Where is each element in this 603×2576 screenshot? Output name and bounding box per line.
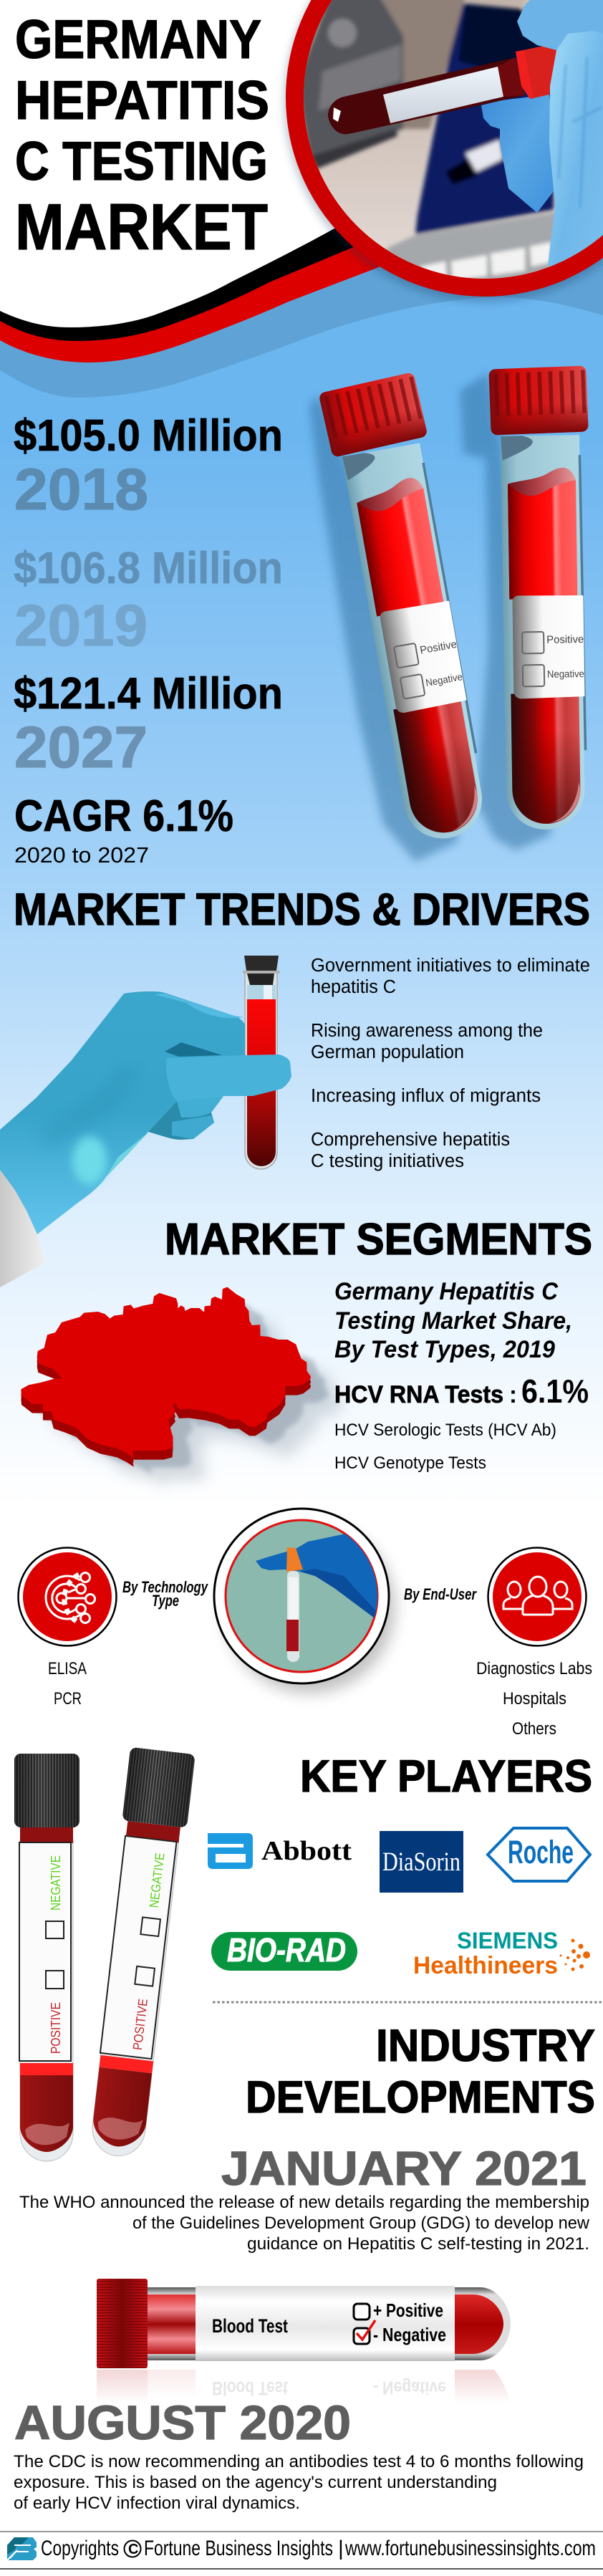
icon: gloved hand holding test tube	[0, 956, 291, 1287]
market share by test types: Germany Hepatitis C	[334, 1278, 558, 1305]
market value stats: $105.0 Million	[14, 411, 283, 461]
market value stats	[14, 411, 283, 868]
icon: people group	[503, 1577, 572, 1615]
icon: black-cap tube left: NEGATIVE	[49, 1855, 63, 1911]
logo: Roche	[488, 1828, 590, 1881]
market value stats: CAGR 6.1%	[14, 792, 233, 841]
tube shadows	[309, 373, 551, 862]
footer	[0, 2532, 603, 2569]
icon: gear with nodes	[46, 1573, 95, 1623]
central circle photo	[214, 1509, 395, 1693]
icon: Fortune Business Insights logo	[7, 2537, 37, 2560]
footer: Copyrights	[41, 2537, 119, 2560]
heading: market segments: MARKET SEGMENTS	[165, 1215, 592, 1264]
development: January 2021: JANUARY 2021	[221, 2142, 587, 2196]
trends and drivers list	[311, 956, 590, 1171]
trends and drivers list: Increasing influx of migrants	[311, 1086, 541, 1106]
footer: Fortune Business Insights	[144, 2537, 333, 2560]
market share by test types: HCV Serologic Tests (HCV Ab)	[334, 1421, 556, 1440]
market share by test types: :	[509, 1381, 517, 1408]
segment labels: Hospitals	[503, 1689, 566, 1708]
market share by test types: HCV Genotype Tests	[334, 1453, 486, 1473]
segment labels: PCR	[54, 1689, 82, 1708]
development: August 2020: exposure. This is based on the agency's current understanding	[14, 2473, 497, 2492]
title: MARKET	[15, 191, 268, 264]
icon: black-cap tube right	[84, 1747, 196, 2160]
trends and drivers list: Comprehensive hepatitis	[311, 1130, 510, 1150]
market value stats: 2027	[14, 715, 148, 780]
trends and drivers list: German population	[311, 1042, 464, 1062]
trends and drivers list: Rising awareness among the	[311, 1021, 543, 1041]
hand	[0, 991, 245, 1234]
market value stats: 2019	[14, 593, 148, 658]
segment labels: By Technology	[122, 1578, 208, 1596]
footer: |	[338, 2537, 344, 2560]
development: January 2021: guidance on Hepatitis C self-testing in 2021.	[247, 2234, 589, 2254]
segment labels: ELISA	[48, 1659, 87, 1678]
reflection: - Negative	[373, 2378, 446, 2398]
trends and drivers list: C testing initiatives	[311, 1151, 464, 1171]
icon: horizontal blood test tube	[97, 2279, 511, 2403]
logo: Abbott: Abbott	[261, 1836, 352, 1866]
development: August 2020: AUGUST 2020	[14, 2396, 351, 2450]
development: August 2020: of early HCV infection viral dynamics.	[14, 2494, 300, 2513]
icon: black-cap tube right: NEGATIVE	[147, 1852, 168, 1908]
development: January 2021	[19, 2142, 589, 2254]
icon: left red blood tube: Positive	[419, 638, 458, 657]
technology segment circle	[19, 1547, 116, 1646]
logo: DiaSorin	[380, 1831, 463, 1893]
market share by test types: 6.1%	[521, 1373, 589, 1410]
title	[15, 9, 269, 264]
icon: horizontal blood test tube: - Negative	[373, 2324, 446, 2345]
logo: Abbott	[208, 1833, 352, 1869]
logo: Bio-Rad: BIO-RAD	[227, 1931, 346, 1969]
trends and drivers list: Government initiatives to eliminate	[311, 956, 590, 976]
icon: black-cap tube left	[14, 1754, 79, 2161]
market share by test types: HCV RNA Tests	[334, 1381, 503, 1408]
footer: C	[128, 2542, 138, 2557]
segment labels	[48, 1578, 592, 1739]
market value stats: $121.4 Million	[14, 669, 283, 719]
icon: horizontal blood test tube: Blood Test	[212, 2315, 288, 2337]
title: HEPATITIS	[15, 70, 269, 131]
end-user segment circle	[488, 1547, 586, 1646]
market value stats: 2020 to 2027	[14, 842, 149, 868]
small blood tube	[243, 956, 280, 1169]
icon: black-cap tube right: POSITIVE	[130, 1998, 150, 2051]
segment labels: By End-User	[404, 1585, 477, 1603]
icon: left red blood tube: Negative	[425, 671, 463, 688]
icon: right red blood tube	[488, 365, 589, 830]
segment labels: Others	[512, 1719, 556, 1739]
title: GERMANY	[15, 9, 261, 70]
reflection: Blood Test	[212, 2378, 288, 2399]
market value stats: 2018	[14, 457, 148, 522]
segment labels: Type	[152, 1592, 179, 1610]
heading: industry developments: INDUSTRY	[376, 2021, 595, 2071]
logo: DiaSorin: DiaSorin	[382, 1847, 460, 1877]
development: January 2021: of the Guidelines Development Group (GDG) to develop new	[132, 2214, 589, 2233]
development: January 2021: The WHO announced the release of new details regarding the membership	[19, 2193, 589, 2212]
icon: left red blood tube	[318, 372, 490, 845]
development: August 2020	[14, 2396, 584, 2513]
icon: black-cap tube left: POSITIVE	[49, 2002, 63, 2054]
reflection	[97, 2370, 510, 2403]
development: August 2020: The CDC is now recommending an antibodies test 4 to 6 months following	[14, 2452, 584, 2471]
coat sleeve	[0, 1170, 44, 1287]
title: C TESTING	[15, 131, 268, 192]
heading: industry developments	[246, 2021, 595, 2123]
logo: Siemens Healthineers	[413, 1928, 590, 1979]
icon: Germany map	[21, 1287, 343, 1488]
market share by test types: Testing Market Share,	[334, 1307, 572, 1335]
header photo: gloved hand holding blood tube	[284, 0, 603, 302]
icon: right red blood tube: Negative	[547, 668, 584, 680]
trends and drivers list: hepatitis C	[311, 977, 396, 997]
market value stats: $106.8 Million	[14, 544, 283, 593]
market share by test types	[334, 1278, 589, 1473]
icon: horizontal blood test tube: + Positive	[373, 2299, 443, 2321]
icon: right red blood tube: Positive	[546, 633, 584, 646]
logo: Siemens Healthineers: Healthineers	[413, 1952, 558, 1979]
logo: Siemens Healthineers: SIEMENS	[457, 1928, 558, 1953]
header waves	[0, 0, 603, 398]
market share by test types: By Test Types, 2019	[334, 1336, 555, 1363]
